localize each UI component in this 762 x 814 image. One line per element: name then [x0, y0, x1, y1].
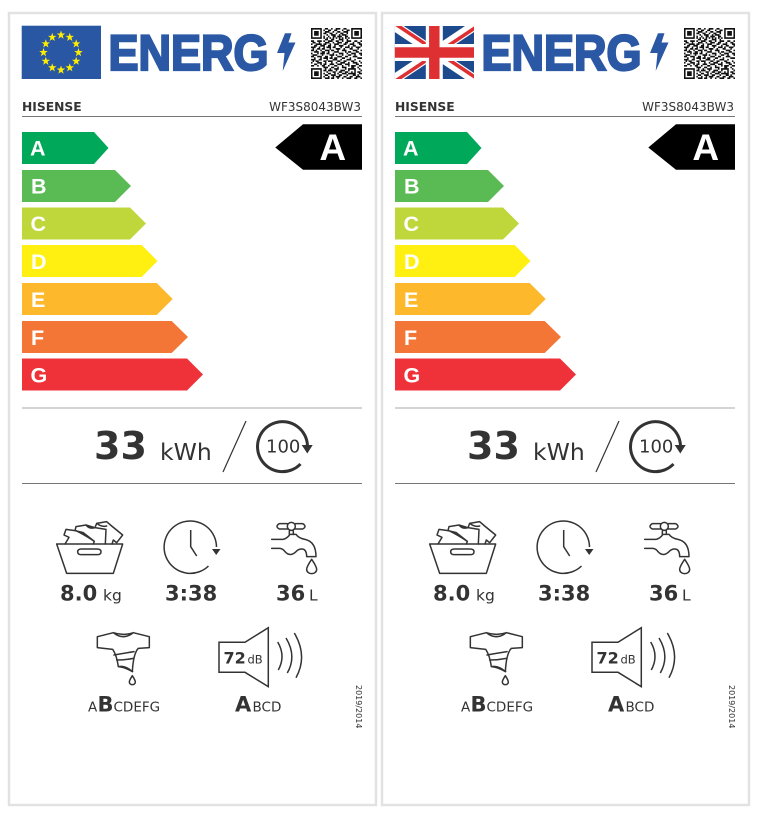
- icon: 100 cycles: [631, 422, 686, 472]
- energy consumption value: [94, 421, 246, 472]
- noise: [219, 628, 302, 716]
- energy scale arrows: B: [404, 174, 420, 198]
- energy scale arrows: E: [404, 288, 418, 312]
- energy scale arrows: C: [404, 212, 419, 236]
- duration: 3:38: [165, 582, 217, 606]
- energy scale arrows: D: [31, 250, 47, 274]
- ENERG wordmark: ENERG: [482, 25, 642, 81]
- spin class: A: [88, 699, 98, 715]
- energy scale arrows: E: [31, 288, 45, 312]
- spin class: B: [98, 692, 114, 716]
- noise: BCD: [626, 699, 654, 715]
- ENERG wordmark: ENERG: [108, 25, 268, 81]
- model number: WF3S8043BW3: [642, 100, 734, 114]
- energy scale arrows: F: [31, 326, 44, 350]
- icon: 100 cycles: 100: [266, 437, 300, 458]
- energy class indicator: A: [319, 127, 346, 168]
- energy consumption value: kWh: [160, 438, 212, 466]
- EU flag: [22, 26, 101, 79]
- energy class indicator: A: [692, 127, 719, 168]
- QR code: [684, 29, 735, 78]
- icon: 100 cycles: [258, 422, 313, 472]
- capacity: kg: [476, 587, 495, 605]
- water consumption: L: [682, 587, 691, 605]
- noise: [592, 628, 675, 716]
- capacity: [57, 522, 123, 606]
- water consumption: [272, 522, 318, 606]
- regulation number: 2019/2014: [354, 685, 363, 728]
- noise: 72: [224, 648, 246, 667]
- icon: lightning bolt: [650, 33, 668, 71]
- energy scale arrows: D: [404, 250, 420, 274]
- noise: BCD: [252, 699, 281, 715]
- energy scale arrows: G: [30, 364, 47, 388]
- energy scale arrows: B: [31, 174, 47, 198]
- spin class: A: [461, 699, 471, 715]
- energy scale arrows: [395, 132, 576, 390]
- energy scale arrows: A: [403, 137, 419, 161]
- water consumption: L: [309, 587, 318, 605]
- model number: WF3S8043BW3: [269, 100, 361, 114]
- noise: dB: [620, 652, 636, 666]
- brand name: HISENSE: [22, 100, 82, 114]
- water consumption: 36: [649, 582, 678, 606]
- capacity: [430, 522, 496, 606]
- energy scale arrows: F: [404, 326, 417, 350]
- noise: A: [608, 692, 625, 716]
- energy consumption value: 33: [94, 424, 147, 468]
- energy scale arrows: C: [30, 212, 46, 236]
- energy scale arrows: [22, 132, 203, 390]
- icon: lightning bolt: [277, 33, 296, 71]
- capacity: 8.0: [60, 582, 97, 606]
- energy consumption value: kWh: [533, 438, 585, 466]
- water consumption: [645, 522, 691, 606]
- noise: A: [235, 692, 252, 716]
- duration: 3:38: [538, 582, 590, 606]
- panel: EU energy label: [9, 13, 376, 805]
- energy scale arrows: A: [30, 137, 46, 161]
- spin class: [88, 633, 160, 716]
- spin class: CDEFG: [486, 699, 533, 715]
- brand name: HISENSE: [395, 100, 455, 114]
- energy class indicator: [275, 124, 362, 170]
- duration: [537, 521, 594, 606]
- spin class: [461, 633, 533, 716]
- energy scale arrows: G: [404, 364, 420, 388]
- capacity: 8.0: [433, 582, 470, 606]
- noise: 72: [596, 648, 619, 667]
- regulation number: 2019/2014: [727, 685, 736, 728]
- QR code: [311, 29, 362, 78]
- noise: dB: [248, 652, 263, 666]
- panel: UK energy label: [382, 13, 749, 805]
- capacity: kg: [103, 587, 122, 605]
- energy class indicator: [648, 124, 735, 170]
- icon: 100 cycles: 100: [639, 437, 673, 458]
- energy consumption value: 33: [467, 424, 520, 468]
- UK flag: [395, 24, 476, 80]
- water consumption: 36: [276, 582, 305, 606]
- spin class: B: [470, 692, 487, 716]
- spin class: CDEFG: [114, 699, 160, 715]
- duration: [164, 521, 220, 606]
- energy consumption value: [467, 421, 619, 472]
